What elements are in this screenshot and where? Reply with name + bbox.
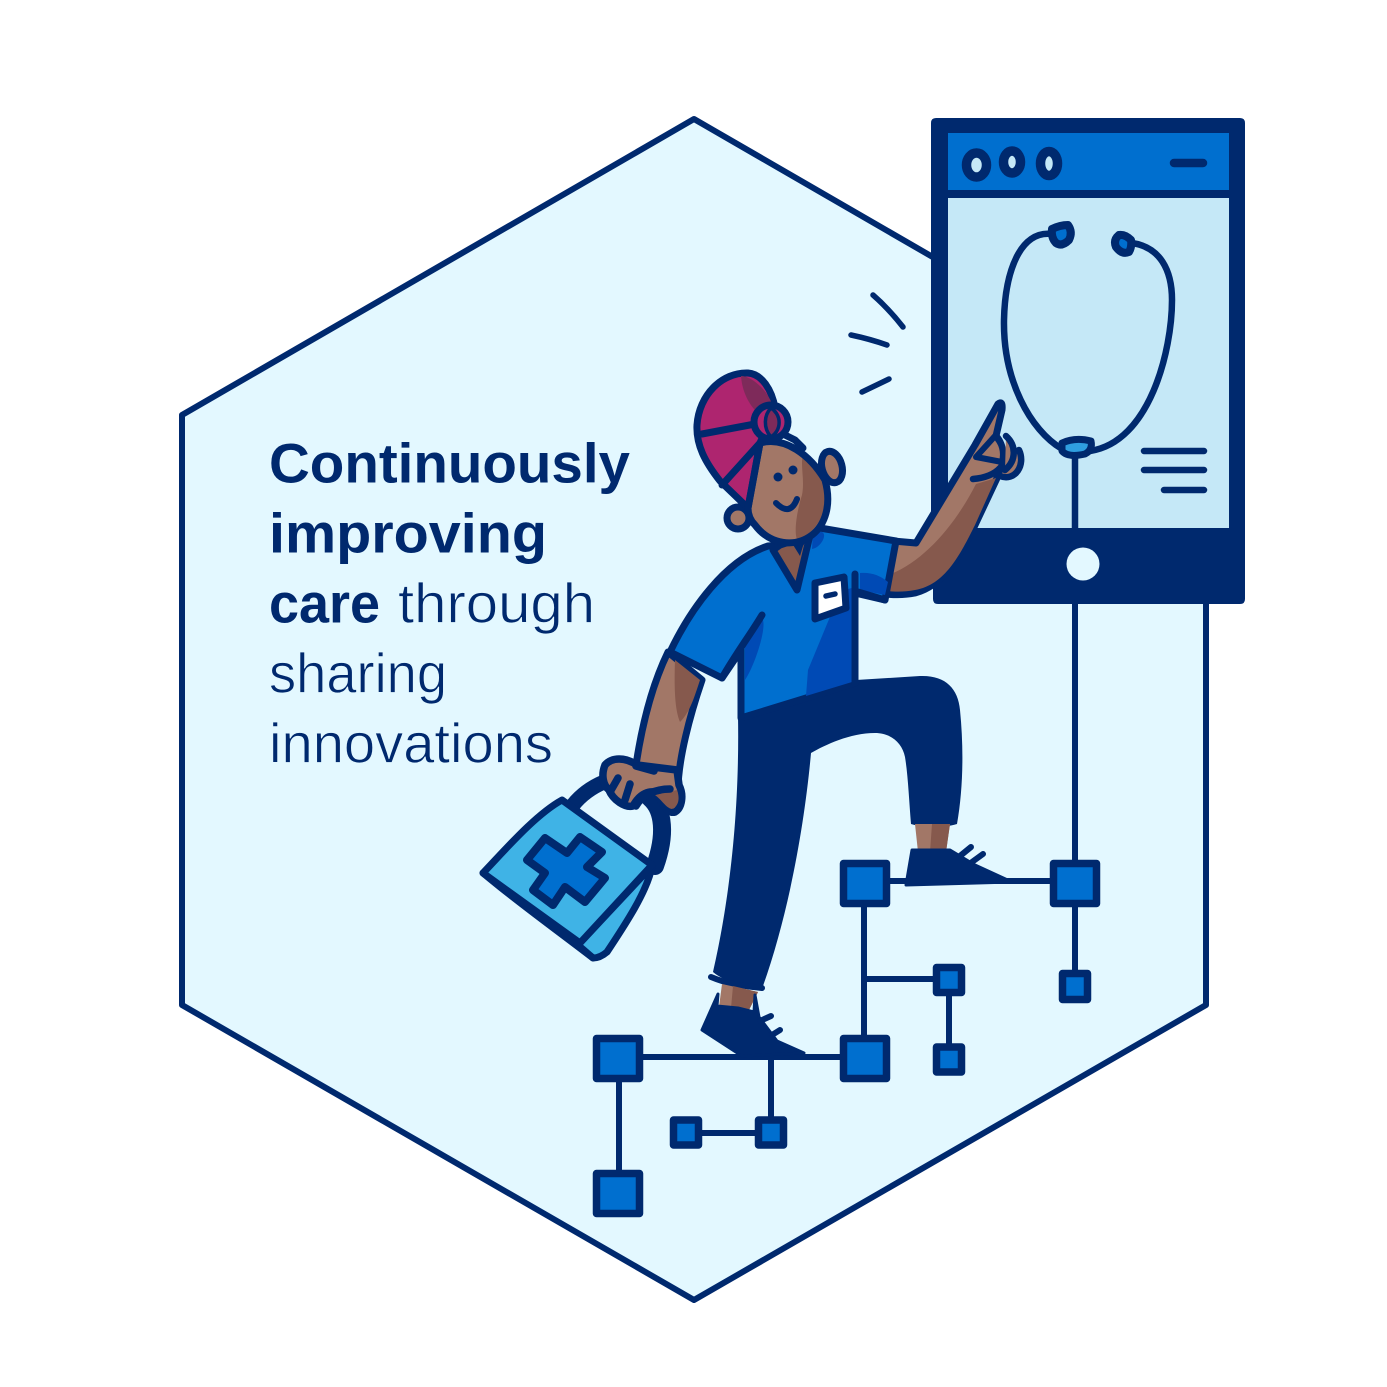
upper ankle and shoe <box>906 824 1012 885</box>
face <box>748 442 828 543</box>
tablet device <box>931 118 1245 604</box>
attention spark lines <box>851 295 903 392</box>
window buttons <box>966 151 1058 177</box>
heading text: innovations <box>269 712 553 774</box>
heading text: care <box>269 572 380 634</box>
hexagon background <box>182 119 1206 1300</box>
lower ankle and shoe <box>702 984 804 1056</box>
network nodes <box>596 864 1096 1214</box>
heading text: sharing <box>269 642 447 704</box>
window dash <box>1174 159 1203 167</box>
heading text: through <box>398 572 595 634</box>
person <box>483 373 1021 1056</box>
ears <box>727 449 846 529</box>
hand holding bag <box>603 759 682 812</box>
heading text: Continuously <box>269 432 630 494</box>
turban <box>697 373 803 508</box>
v-neck <box>773 535 810 590</box>
heading text <box>269 432 630 774</box>
network connector lines <box>619 600 1075 1175</box>
stethoscope <box>1004 225 1172 528</box>
heading text: improving <box>269 502 547 564</box>
scrub top <box>670 528 896 718</box>
tablet header bar <box>948 133 1229 190</box>
trousers <box>713 676 962 986</box>
eyes <box>774 472 782 482</box>
raised right arm <box>885 403 1021 595</box>
lower left arm <box>636 652 702 790</box>
medical cross <box>527 837 605 905</box>
cuff of lower trouser <box>711 977 762 988</box>
tablet frame <box>931 118 1245 604</box>
text lines on screen <box>1144 451 1204 490</box>
smile <box>776 499 797 509</box>
name badge <box>815 577 846 619</box>
tablet screen <box>948 198 1229 528</box>
home button <box>1066 548 1100 580</box>
medical bag <box>483 782 662 958</box>
